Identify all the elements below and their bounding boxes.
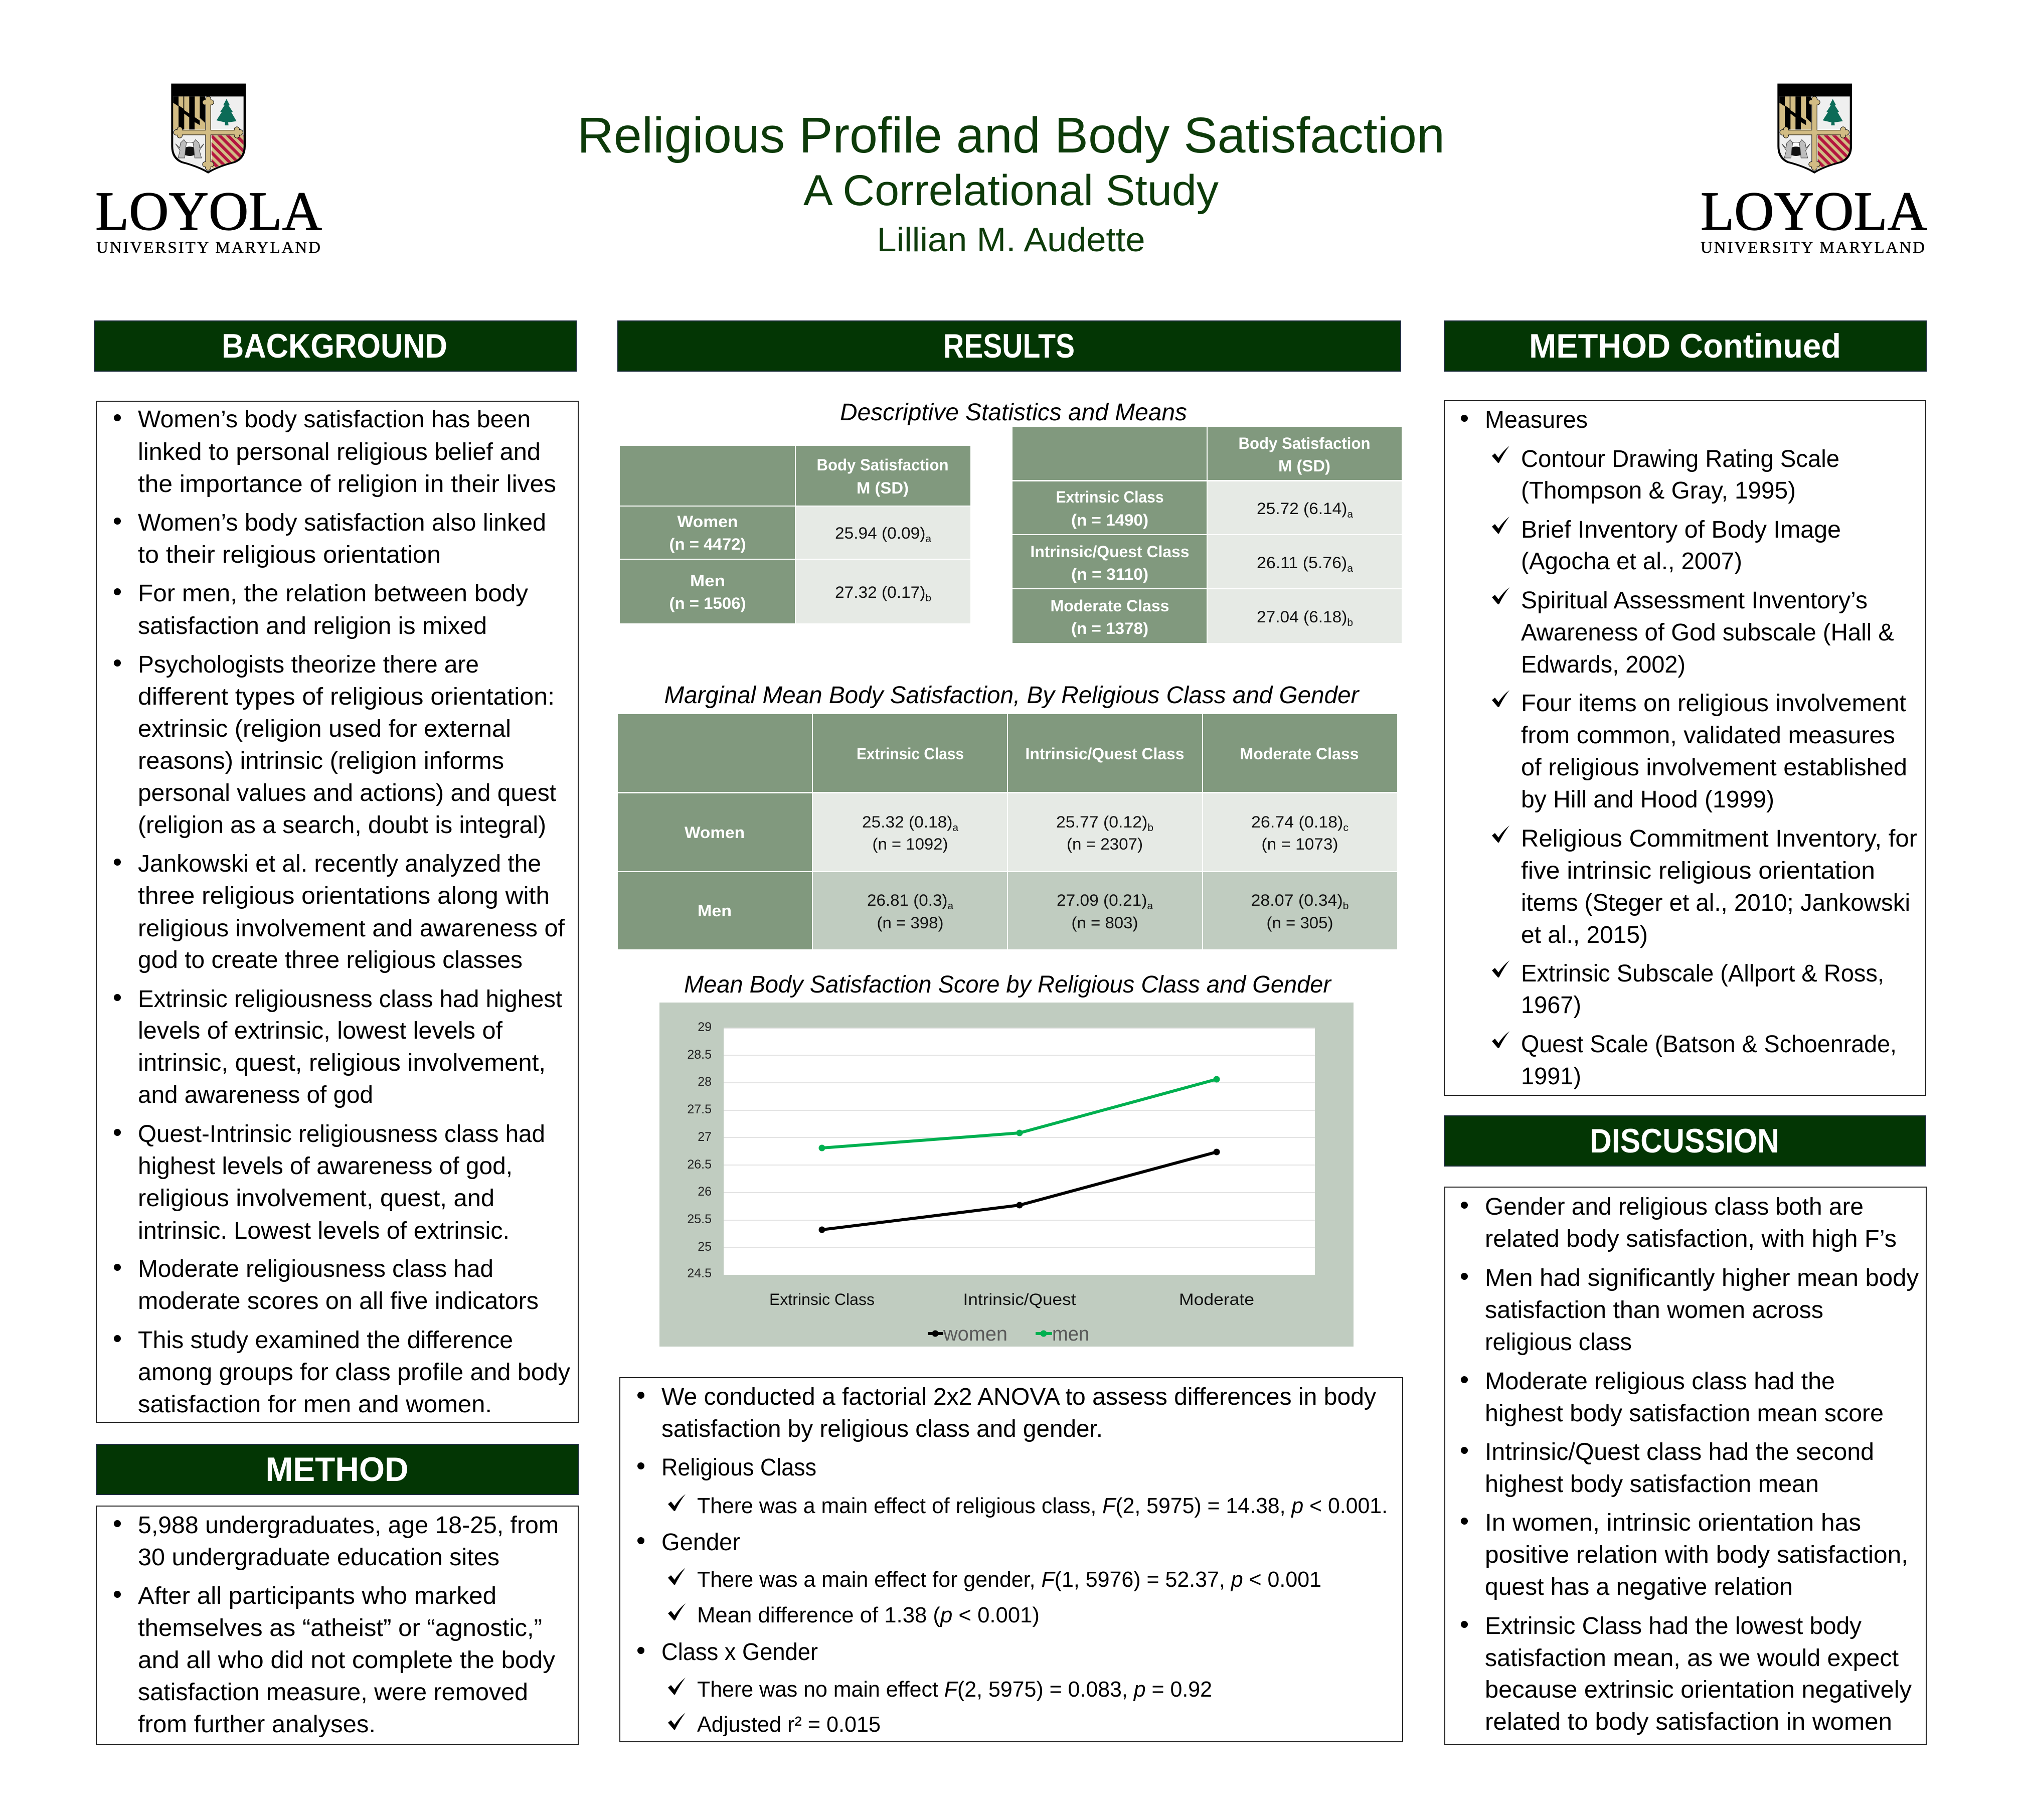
bullet: moderate class: Moderate religious class had the xyxy=(1485,1368,1835,1395)
measure: religious involvement: of religious involvement established xyxy=(1521,754,1907,781)
y axis labels: 29 xyxy=(698,1020,712,1034)
table: marginal means: (n = 803) xyxy=(1071,914,1138,932)
x axis labels: Moderate xyxy=(1179,1290,1254,1308)
measure: religious involvement: Four items on religious involvement xyxy=(1521,690,1906,717)
table: religious class descriptive statistics: Body Satisfaction xyxy=(1239,434,1370,452)
logo subline: UNIVERSITY MARYLAND xyxy=(96,239,320,257)
bullet: moderate class: Moderate religiousness class had xyxy=(138,1256,493,1282)
bullet: men higher: religious class xyxy=(1485,1329,1632,1356)
bullet: this study: among groups for class profile and body xyxy=(138,1359,570,1386)
bullet: gender: Mean difference of 1.38 (p < 0.001) xyxy=(697,1603,1040,1627)
bullet: body satisfaction and belief: Women’s body satisfaction has been xyxy=(138,406,531,433)
bullet: moderate class: highest body satisfaction mean score xyxy=(1485,1400,1884,1427)
measure: religious commitment: Religious Commitment Inventory, for xyxy=(1521,825,1917,852)
bullet: measures: Measures xyxy=(1485,407,1588,433)
measure: quest scale xyxy=(1492,1031,1897,1090)
table caption: marginal means: Marginal Mean Body Satisfaction, By Religious Class and Gender xyxy=(664,682,1360,709)
table: marginal means: (n = 1092) xyxy=(873,835,948,853)
author: Lillian M. Audette xyxy=(877,221,1145,259)
table: gender descriptive statistics: M (SD) xyxy=(857,479,909,497)
bullet: gender and class: related body satisfaction, with high F’s xyxy=(1485,1226,1897,1252)
bullet: Jankowski: Jankowski et al. recently analyzed the xyxy=(138,851,541,877)
x axis labels: Intrinsic/Quest xyxy=(963,1290,1076,1308)
table: gender descriptive statistics xyxy=(620,446,970,623)
subtitle: A Correlational Study xyxy=(803,167,1219,215)
bullet: body satisfaction and belief xyxy=(114,406,556,498)
measure: religious commitment: items (Steger et al., 2010; Jankowski xyxy=(1521,890,1910,916)
bullet: religious class xyxy=(637,1454,1388,1518)
heading: method continued xyxy=(1444,321,1926,371)
table: gender descriptive statistics: (n = 1506) xyxy=(669,594,746,612)
table: marginal means: 25.77 (0.12) xyxy=(1056,813,1143,831)
bullet: men higher xyxy=(1461,1265,1919,1356)
table: religious class descriptive statistics: (n = 1378) xyxy=(1071,619,1148,637)
measure: extrinsic subscale xyxy=(1492,960,1884,1019)
bullet: quest-intrinsic class: intrinsic. Lowest levels of extrinsic. xyxy=(138,1218,510,1244)
bullet: gender: Gender xyxy=(661,1529,740,1556)
icon: shield crest xyxy=(171,83,246,174)
measure: spiritual assessment: Spiritual Assessment Inventory’s xyxy=(1521,587,1868,614)
table: gender descriptive statistics: Men xyxy=(690,572,725,590)
table: marginal means: Extrinsic Class xyxy=(857,745,964,763)
bullet: men higher: Men had significantly higher mean body xyxy=(1485,1265,1919,1291)
panel: method continued xyxy=(1444,401,1926,1095)
bullet: religious orientation xyxy=(114,510,546,568)
legend: women xyxy=(943,1323,1007,1345)
bullet: gender xyxy=(637,1529,1321,1627)
bullet: class by gender xyxy=(637,1639,1212,1737)
measure: spiritual assessment: Edwards, 2002) xyxy=(1521,651,1686,678)
table: marginal means: (n = 305) xyxy=(1267,914,1333,932)
bullet: class by gender: There was no main effect F(2, 5975) = 0.083, p = 0.92 xyxy=(697,1677,1212,1702)
y axis labels: 24.5 xyxy=(687,1266,712,1280)
bullet: types of orientation: (religion as a search, doubt is integral) xyxy=(138,812,546,839)
table: marginal means: Men xyxy=(698,902,732,920)
bullet: extrinsic class: Extrinsic Class had the lowest body xyxy=(1485,1613,1862,1639)
measure: religious involvement: by Hill and Hood (1999) xyxy=(1521,786,1774,813)
panel: discussion xyxy=(1445,1187,1926,1744)
table: marginal means: 28.07 (0.34) xyxy=(1251,891,1337,909)
chart caption: Mean Body Satisfaction Score by Religious Class and Gender xyxy=(684,971,1332,998)
bullet: class by gender: Class x Gender xyxy=(661,1639,818,1666)
bullet: moderate class: moderate scores on all five indicators xyxy=(138,1288,539,1314)
y axis labels xyxy=(687,1020,712,1280)
table: marginal means: 25.32 (0.18) xyxy=(862,813,949,831)
bullet: quest-intrinsic class xyxy=(114,1121,545,1244)
bullet: types of orientation: personal values and actions) and quest xyxy=(138,780,556,806)
heading: background xyxy=(94,321,576,371)
panel: method xyxy=(96,1506,578,1744)
y axis labels: 25.5 xyxy=(687,1212,712,1226)
table: gender descriptive statistics: 27.32 (0.17) xyxy=(835,583,922,601)
y axis labels: 27.5 xyxy=(687,1102,712,1116)
table: marginal means: Intrinsic/Quest Class xyxy=(1025,745,1185,763)
table: religious class descriptive statistics: M (SD) xyxy=(1278,457,1330,475)
bullet: extrinsic class: satisfaction mean, as we would expect xyxy=(1485,1645,1899,1672)
table: marginal means: b xyxy=(1147,822,1153,834)
measure: contour drawing xyxy=(1492,446,1839,504)
table: religious class descriptive statistics: (n = 1490) xyxy=(1071,511,1148,529)
table: religious class descriptive statistics: a xyxy=(1347,509,1354,520)
bullet: Jankowski xyxy=(114,851,565,973)
bullet: exclusions: and all who did not complete the body xyxy=(138,1647,555,1674)
panel: ANOVA results xyxy=(620,1378,1403,1742)
bullet: extrinsic class: related to body satisfaction in women xyxy=(1485,1709,1892,1735)
table: marginal means: a xyxy=(952,822,959,834)
heading: results xyxy=(618,321,1401,371)
y axis labels: 28.5 xyxy=(687,1048,712,1062)
bullet: types of orientation: extrinsic (religion used for external xyxy=(138,716,511,742)
bullet: quest-intrinsic class: Quest-Intrinsic religiousness class had xyxy=(138,1121,545,1147)
bullet: extrinsic class: intrinsic, quest, religious involvement, xyxy=(138,1050,546,1076)
legend: men xyxy=(1052,1323,1089,1345)
logo: Loyola University Maryland, right xyxy=(1701,84,1927,257)
bullet: intrinsic/quest class: Intrinsic/Quest class had the second xyxy=(1485,1439,1874,1465)
bullet: extrinsic class xyxy=(114,986,562,1108)
bullet: extrinsic class xyxy=(1461,1613,1912,1735)
table: religious class descriptive statistics: 26.11 (5.76) xyxy=(1257,554,1342,572)
measure: body image: (Agocha et al., 2007) xyxy=(1521,548,1742,575)
table: marginal means: b xyxy=(1343,901,1349,912)
y axis labels: 26 xyxy=(698,1185,712,1199)
y axis labels: 27 xyxy=(698,1130,712,1144)
bullet: class by gender: Adjusted r² = 0.015 xyxy=(697,1712,881,1737)
bullet: Jankowski: religious involvement and awareness of xyxy=(138,915,565,942)
bullet: types of orientation: reasons) intrinsic (religion informs xyxy=(138,748,504,774)
table: marginal means: a xyxy=(947,901,954,912)
measure: spiritual assessment: Awareness of God subscale (Hall & xyxy=(1521,619,1894,646)
bullet: women's orientation: In women, intrinsic orientation has xyxy=(1485,1510,1861,1536)
measure: spiritual assessment xyxy=(1492,587,1894,678)
table: marginal means: (n = 1073) xyxy=(1262,835,1338,853)
measure: quest scale: Quest Scale (Batson & Schoenrade, xyxy=(1521,1031,1897,1058)
logo subline: UNIVERSITY MARYLAND xyxy=(1701,239,1925,257)
table: marginal means xyxy=(618,714,1397,949)
x axis labels: Extrinsic Class xyxy=(769,1290,875,1308)
bullet: extrinsic class: because extrinsic orientation negatively xyxy=(1485,1677,1912,1703)
measure: extrinsic subscale: 1967) xyxy=(1521,992,1581,1019)
heading: method xyxy=(96,1444,578,1495)
bullet: women's orientation: quest has a negative relation xyxy=(1485,1574,1793,1600)
bullet: men xyxy=(114,580,528,639)
bullet: this study: satisfaction for men and women. xyxy=(138,1391,492,1418)
bullet: extrinsic class: levels of extrinsic, lowest levels of xyxy=(138,1018,503,1044)
bullet: quest-intrinsic class: highest levels of awareness of god, xyxy=(138,1153,513,1180)
bullet: factorial ANOVA: We conducted a factorial 2x2 ANOVA to assess differences in body xyxy=(661,1384,1376,1410)
table: marginal means: Women xyxy=(685,823,745,842)
bullet: gender and class xyxy=(1461,1194,1897,1252)
bullet: moderate class xyxy=(114,1256,539,1314)
series: women xyxy=(818,1148,1220,1233)
bullet: types of orientation: Psychologists theorize there are xyxy=(138,651,479,678)
table: religious class descriptive statistics: Moderate Class xyxy=(1050,597,1169,615)
heading: discussion: DISCUSSION xyxy=(1590,1122,1779,1160)
measure: religious commitment: five intrinsic religious orientation xyxy=(1521,858,1875,884)
bullet: gender: There was a main effect for gender, F(1, 5976) = 52.37, p < 0.001 xyxy=(697,1567,1321,1592)
bullet: body satisfaction and belief: linked to personal religious belief and xyxy=(138,439,541,465)
table: religious class descriptive statistics: Intrinsic/Quest Class xyxy=(1030,543,1190,561)
logo wordmark: LOYOLA xyxy=(95,181,322,242)
table: marginal means: 26.74 (0.18) xyxy=(1251,813,1338,831)
bullet: participants xyxy=(114,1512,559,1571)
bullet: religious orientation: to their religious orientation xyxy=(138,542,441,568)
table: marginal means: (n = 2307) xyxy=(1067,835,1143,853)
bullet: participants: 5,988 undergraduates, age 18-25, from xyxy=(138,1512,559,1539)
measure: religious involvement: from common, validated measures xyxy=(1521,722,1895,749)
table: gender descriptive statistics: Body Satisfaction xyxy=(816,456,949,474)
measure: religious commitment: et al., 2015) xyxy=(1521,922,1648,948)
bullet: women's orientation: positive relation with body satisfaction, xyxy=(1485,1542,1908,1568)
table caption: descriptive statistics: Descriptive Statistics and Means xyxy=(840,399,1187,426)
title: Religious Profile and Body Satisfaction xyxy=(577,107,1445,163)
table: religious class descriptive statistics xyxy=(1013,427,1402,643)
bullet: types of orientation: different types of religious orientation: xyxy=(138,684,555,710)
table: marginal means: Moderate Class xyxy=(1240,745,1359,763)
bullet: exclusions: satisfaction measure, were removed xyxy=(138,1679,528,1706)
legend xyxy=(928,1323,1089,1345)
table: gender descriptive statistics: b xyxy=(925,593,931,604)
table: marginal means: (n = 398) xyxy=(877,914,944,932)
panel: background xyxy=(96,401,578,1422)
bullet: gender and class: Gender and religious class both are xyxy=(1485,1194,1864,1220)
bullet: religious class: Religious Class xyxy=(661,1454,816,1481)
bullet: women's orientation xyxy=(1461,1510,1908,1600)
measure: religious commitment xyxy=(1492,825,1917,948)
bullet: body satisfaction and belief: the importance of religion in their lives xyxy=(138,471,556,498)
bullet: this study: This study examined the difference xyxy=(138,1327,513,1354)
bullet: religious class: There was a main effect of religious class, F(2, 5975) = 14.38, p < 0.001. xyxy=(697,1494,1388,1518)
bullet: intrinsic/quest class: highest body satisfaction mean xyxy=(1485,1471,1819,1498)
table: religious class descriptive statistics: b xyxy=(1347,617,1353,628)
logo wordmark: LOYOLA xyxy=(1701,181,1927,242)
bullet: Jankowski: three religious orientations along with xyxy=(138,883,550,909)
table: gender descriptive statistics: (n = 4472) xyxy=(669,535,746,553)
y axis labels: 25 xyxy=(698,1240,712,1254)
measure: quest scale: 1991) xyxy=(1521,1063,1581,1090)
heading: results: RESULTS xyxy=(943,327,1075,365)
bullet: participants: 30 undergraduate education sites xyxy=(138,1544,499,1571)
table: religious class descriptive statistics: Extrinsic Class xyxy=(1056,488,1163,506)
y axis labels: 28 xyxy=(698,1075,712,1089)
table: gender descriptive statistics: 25.94 (0.09) xyxy=(835,524,922,542)
table: marginal means: c xyxy=(1343,822,1349,834)
line chart: mean body satisfaction xyxy=(659,1003,1354,1347)
series: men xyxy=(818,1076,1220,1151)
table: gender descriptive statistics: Women xyxy=(677,513,738,531)
bullet: religious orientation: Women’s body satisfaction also linked xyxy=(138,510,546,536)
icon: shield crest xyxy=(1777,84,1858,201)
measure: body image: Brief Inventory of Body Image xyxy=(1521,517,1841,543)
bullet: factorial ANOVA: satisfaction by religious class and gender. xyxy=(661,1416,1103,1442)
x axis labels xyxy=(769,1290,1254,1308)
table: marginal means: 26.81 (0.3) xyxy=(867,891,945,909)
heading: background: BACKGROUND xyxy=(222,327,447,365)
measure: contour drawing: Contour Drawing Rating Scale xyxy=(1521,446,1839,472)
table: religious class descriptive statistics: (n = 3110) xyxy=(1071,565,1148,583)
measure: religious involvement xyxy=(1492,690,1907,813)
bullet: this study xyxy=(114,1327,570,1418)
heading: method: METHOD xyxy=(266,1450,408,1488)
bullet: men: For men, the relation between body xyxy=(138,580,528,607)
bullet: extrinsic class: and awareness of god xyxy=(138,1082,373,1108)
table: gender descriptive statistics: a xyxy=(925,534,932,545)
table: marginal means: a xyxy=(1147,901,1153,912)
y axis labels: 26.5 xyxy=(687,1157,712,1172)
measure: contour drawing: (Thompson & Gray, 1995) xyxy=(1521,477,1796,504)
bullet: exclusions: After all participants who marked xyxy=(138,1583,496,1609)
table: religious class descriptive statistics: a xyxy=(1347,563,1354,574)
measure: extrinsic subscale: Extrinsic Subscale (Allport & Ross, xyxy=(1521,960,1884,987)
bullet: men higher: satisfaction than women across xyxy=(1485,1297,1823,1323)
measure: body image xyxy=(1492,517,1841,575)
bullet: Jankowski: god to create three religious classes xyxy=(138,947,523,973)
bullet: exclusions xyxy=(114,1583,555,1738)
bullet: intrinsic/quest class xyxy=(1461,1439,1874,1498)
table: religious class descriptive statistics: 27.04 (6.18) xyxy=(1257,608,1343,626)
table: marginal means: 27.09 (0.21) xyxy=(1057,891,1143,909)
bullet: factorial ANOVA xyxy=(637,1384,1376,1442)
bullet: moderate class xyxy=(1461,1368,1884,1427)
heading: discussion xyxy=(1444,1116,1926,1166)
bullet: extrinsic class: Extrinsic religiousness class had highest xyxy=(138,986,562,1013)
bullet: quest-intrinsic class: religious involvement, quest, and xyxy=(138,1185,494,1212)
bullet: types of orientation xyxy=(114,651,556,839)
bullet: exclusions: from further analyses. xyxy=(138,1711,376,1738)
logo: Loyola University Maryland, left xyxy=(95,84,322,257)
bullet: exclusions: themselves as “atheist” or “agnostic,” xyxy=(138,1615,542,1641)
bullet: men: satisfaction and religion is mixed xyxy=(138,613,487,639)
heading: method continued: METHOD Continued xyxy=(1529,327,1841,365)
table: religious class descriptive statistics: 25.72 (6.14) xyxy=(1257,500,1343,518)
